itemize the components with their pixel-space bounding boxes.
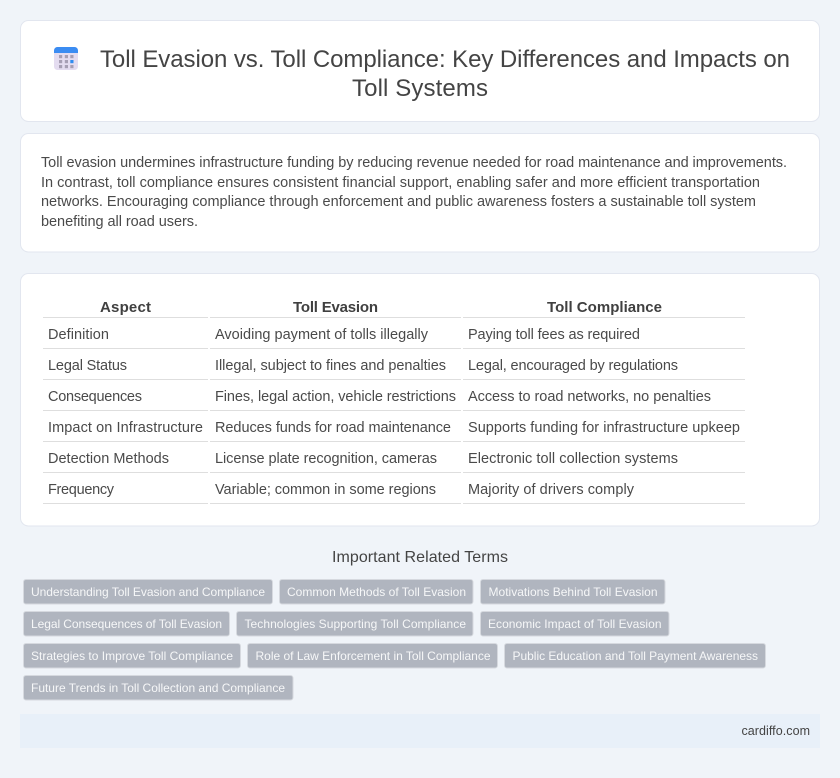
chip: Public Education and Toll Payment Awareness — [512, 649, 758, 663]
footer — [20, 714, 820, 748]
table row: definition: Paying toll fees as required — [468, 327, 640, 343]
chip: Future Trends in Toll Collection and Compliance — [31, 681, 285, 695]
table row: legal status: Legal, encouraged by regulations — [468, 358, 678, 374]
table row: impact on infrastructure: Reduces funds for road maintenance — [215, 420, 451, 436]
table row: legal status: Legal Status — [48, 358, 127, 374]
chip: Strategies to Improve Toll Compliance — [31, 649, 233, 663]
table row: definition: Avoiding payment of tolls illegally — [215, 327, 429, 343]
chip — [236, 612, 473, 636]
table row: impact on infrastructure: Impact on Infrastructure — [48, 420, 203, 436]
text block: introduction: benefiting all road users. — [41, 214, 198, 230]
text block: introduction: Toll evasion undermines infrastructure funding by reducing revenue needed for road maintenance and improvements. — [41, 155, 787, 171]
chip — [24, 644, 240, 668]
table row: frequency: Variable; common in some regions — [215, 482, 436, 498]
chip — [280, 580, 473, 604]
chip — [480, 580, 665, 604]
table row: detection methods: Electronic toll collection systems — [468, 451, 678, 467]
chip — [504, 644, 766, 668]
chip: Understanding Toll Evasion and Compliance — [31, 585, 265, 599]
table row: consequences — [48, 389, 711, 405]
table header: Aspect — [100, 299, 151, 316]
title: Toll Evasion vs. Toll Compliance: Key Differences and Impacts on — [100, 46, 790, 73]
chip — [24, 676, 293, 700]
text block: introduction — [41, 155, 787, 230]
table row: impact on infrastructure: Supports funding for infrastructure upkeep — [468, 420, 740, 436]
chip — [24, 580, 272, 604]
heading: related terms: Important Related Terms — [332, 549, 508, 566]
table row: consequences: Access to road networks, no penalties — [468, 389, 711, 405]
panel: comparison table — [20, 274, 820, 526]
related term chips — [24, 580, 766, 700]
panel: header — [20, 20, 820, 122]
chip — [480, 612, 669, 636]
table row: definition — [48, 327, 640, 343]
chip: Technologies Supporting Toll Compliance — [244, 617, 466, 631]
table row: legal status — [48, 358, 678, 374]
title: Toll Systems — [352, 75, 488, 102]
text block: introduction: networks. Encouraging compliance through enforcement and public awareness fosters a sustainable toll system — [41, 194, 756, 210]
footer: cardiffo.com — [742, 724, 810, 738]
table header — [100, 299, 662, 316]
table header: Toll Compliance — [547, 299, 662, 316]
table header: Toll Evasion — [293, 299, 378, 316]
table row: legal status: Illegal, subject to fines and penalties — [215, 358, 446, 374]
table row: frequency: Frequency — [48, 482, 115, 498]
table row: frequency — [48, 482, 635, 498]
panel: introduction — [20, 134, 820, 252]
table row: consequences: Consequences — [48, 389, 142, 405]
chip — [24, 612, 230, 636]
text block: introduction: In contrast, toll compliance ensures consistent financial support, enabling safer and more efficient transportation — [41, 175, 760, 191]
chip — [248, 644, 498, 668]
icon: calendar — [54, 47, 78, 70]
table row: detection methods: License plate recognition, cameras — [215, 451, 437, 467]
chip: Legal Consequences of Toll Evasion — [31, 617, 222, 631]
chip: Role of Law Enforcement in Toll Compliance — [256, 649, 491, 663]
table row: frequency: Majority of drivers comply — [468, 482, 635, 498]
chip: Motivations Behind Toll Evasion — [488, 585, 658, 599]
table row: definition: Definition — [48, 327, 109, 343]
table row: detection methods — [48, 451, 678, 467]
table row: consequences: Fines, legal action, vehicle restrictions — [215, 389, 456, 405]
chip: Economic Impact of Toll Evasion — [488, 617, 662, 631]
chip: Common Methods of Toll Evasion — [287, 585, 466, 599]
title — [100, 46, 790, 102]
table row: detection methods: Detection Methods — [48, 451, 169, 467]
table row: impact on infrastructure — [48, 420, 740, 436]
